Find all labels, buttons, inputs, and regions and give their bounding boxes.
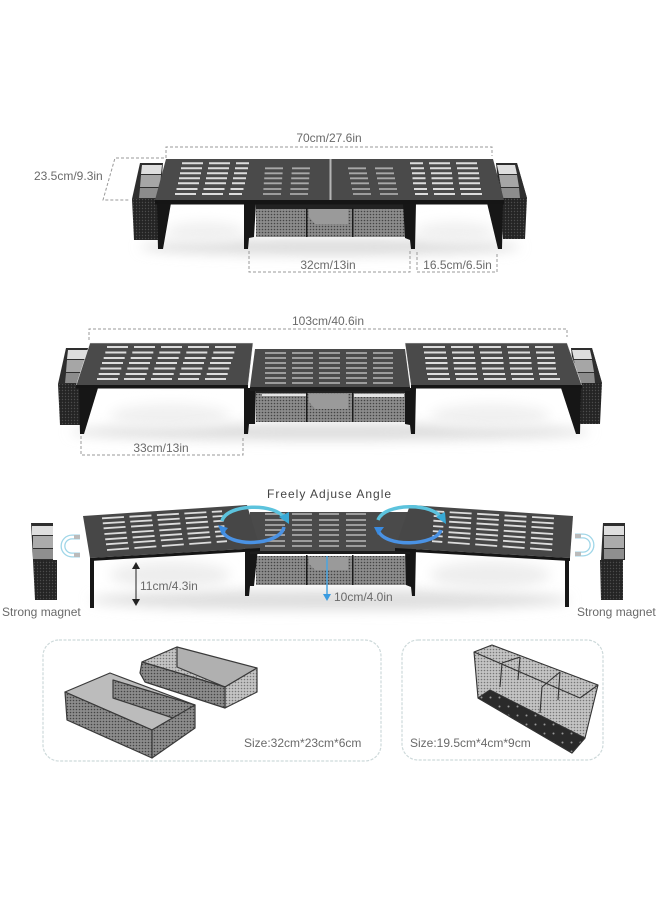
dimension: 32cm [249, 251, 410, 272]
height arrow: 11cm [132, 562, 198, 606]
left panel [83, 505, 260, 561]
stand top surface [155, 159, 504, 204]
dimension: 33cm [81, 436, 243, 455]
dimension: 16.5cm [417, 252, 497, 272]
dimension: 70cm width: 70cm/27.6in [296, 131, 362, 145]
drawer illustration [65, 647, 257, 758]
dimension: 16.5cm: 16.5cm/6.5in [423, 258, 492, 272]
drawer size: Size:32cm*23cm*6cm [244, 736, 361, 750]
icon: right magnet [575, 536, 592, 554]
icon: left magnet [63, 537, 80, 555]
dimension: 32cm: 32cm/13in [300, 258, 356, 272]
height arrow: 10cm [323, 556, 393, 604]
icon: right rotation arrows [374, 507, 446, 543]
height arrow: 11cm: 11cm/4.3in [140, 579, 198, 593]
left pen basket [58, 348, 89, 425]
icon: left rotation arrows [218, 507, 289, 542]
heading: freely adjust angle: Freely Adjuse Angle [267, 487, 392, 501]
top stand: closed 70cm configuration [132, 159, 527, 255]
label: right strong magnet: Strong magnet [577, 605, 656, 619]
dimension: 23.5cm depth [34, 158, 164, 200]
middle stand: extended 103cm configuration [58, 343, 602, 440]
drawer [256, 389, 406, 422]
left detached basket [31, 523, 57, 600]
right pen basket [496, 163, 527, 239]
pen basket illustration [474, 645, 598, 753]
centre panel [250, 512, 410, 554]
dimension: 70cm width [166, 131, 492, 158]
left panel [76, 343, 253, 388]
right panel [395, 505, 573, 561]
panel: drawer detail [43, 640, 381, 761]
stand legs [79, 388, 581, 434]
drawer [256, 555, 406, 585]
drawer [256, 204, 406, 237]
label: left strong magnet: Strong magnet [2, 605, 81, 619]
dimension: 103cm width [89, 314, 567, 340]
dimension: 23.5cm depth: 23.5cm/9.3in [34, 169, 103, 183]
centre panel [250, 349, 410, 391]
dimension: 33cm: 33cm/13in [133, 441, 189, 455]
panel: pen basket detail [402, 640, 603, 760]
bottom stand: angled configuration [83, 505, 573, 610]
right pen basket [571, 348, 602, 424]
basket size: Size:19.5cm*4cm*9cm [410, 736, 531, 750]
left pen basket [132, 163, 163, 240]
stand legs [90, 548, 569, 608]
right panel [405, 343, 582, 388]
height arrow: 10cm: 10cm/4.0in [334, 590, 393, 604]
back tray [140, 647, 257, 708]
front tray [65, 673, 195, 758]
right detached basket [600, 523, 625, 600]
stand legs [157, 203, 503, 249]
dimension: 103cm width: 103cm/40.6in [292, 314, 364, 328]
